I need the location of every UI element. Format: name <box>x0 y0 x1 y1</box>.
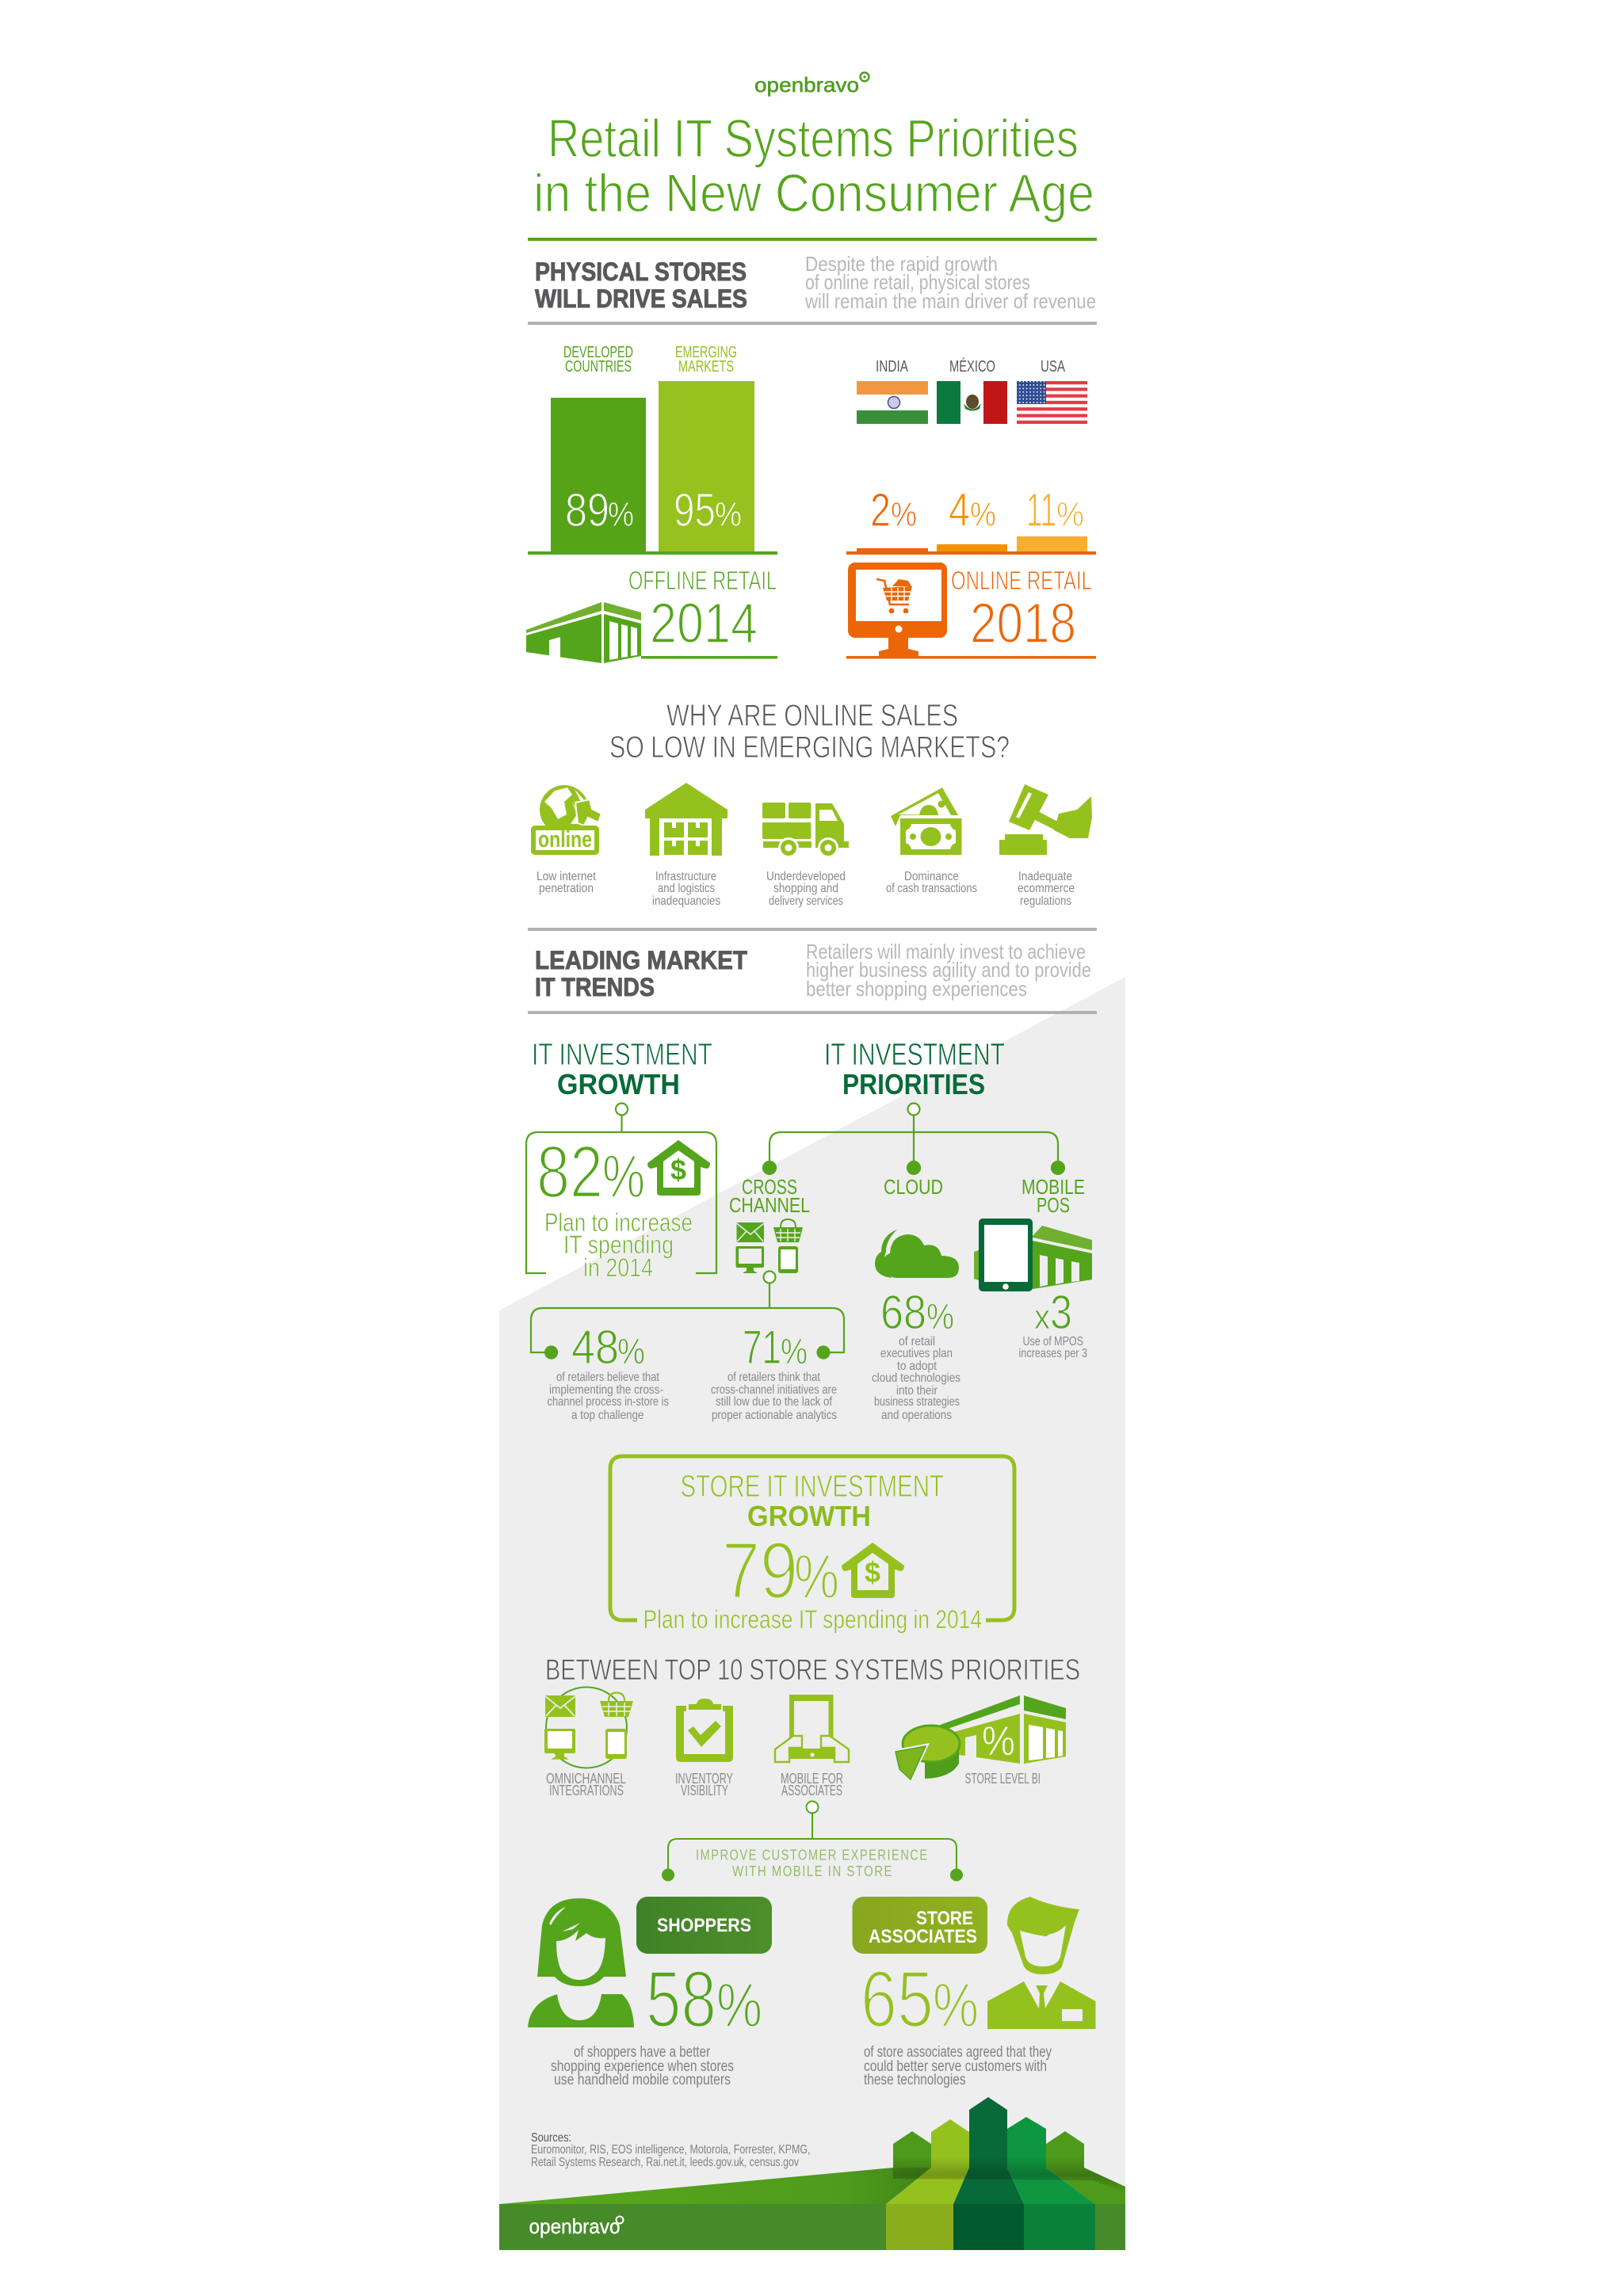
label: mobile pos: POS <box>1037 1193 1070 1217</box>
icon: tablet in store <box>974 1219 1092 1291</box>
text: 71% description: proper actionable analytics <box>712 1409 837 1422</box>
offline retail label: OFFLINE RETAIL <box>628 566 777 595</box>
logo: openbravo top: openbravo <box>754 73 859 97</box>
heading: IT investment growth: GROWTH <box>557 1068 680 1100</box>
footer: green arrows and road <box>499 2097 1125 2250</box>
subheading: physical stores: Despite the rapid growth <box>805 252 998 276</box>
gray background panel <box>499 977 1125 2250</box>
subheading: leading market: Retailers will mainly invest to achieve <box>806 940 1086 963</box>
heading: between top 10: BETWEEN TOP 10 STORE SYSTEMS PRIORITIES <box>545 1653 1080 1686</box>
arrow: light green <box>931 2119 969 2168</box>
label: cross channel <box>729 1175 810 1217</box>
text: 68% description: to adopt <box>897 1360 937 1373</box>
label: infrastructure: Infrastructure <box>655 870 716 883</box>
label: omnichannel: OMNICHANNEL <box>546 1771 626 1787</box>
stat: 82%: 82 <box>537 1131 603 1213</box>
label: mobile pos <box>1022 1175 1085 1217</box>
stat: 68%: % <box>926 1296 954 1337</box>
label: cash: of cash transactions <box>886 882 977 895</box>
badge: store associates: ASSOCIATES <box>869 1926 977 1947</box>
heading: physical stores <box>535 257 747 313</box>
year 2018: 2018 <box>970 593 1076 655</box>
text: 48% description <box>547 1371 669 1422</box>
heading: leading market it trends: LEADING MARKET <box>535 946 747 974</box>
label: low internet <box>537 870 596 895</box>
text: plan to increase: in 2014 <box>583 1253 653 1282</box>
text: 71% description <box>711 1371 837 1422</box>
panel: store associates <box>853 1897 1095 2088</box>
arrow: far left <box>893 2131 931 2168</box>
stat: 71%: 71 <box>743 1321 781 1374</box>
stat: 65%: 65 <box>861 1955 934 2044</box>
stat: 48%: % <box>617 1331 645 1371</box>
icon: inventory clipboard <box>676 1699 733 1762</box>
subheading: leading market: better shopping experiences <box>806 977 1027 1001</box>
icon: woman <box>528 1898 634 2027</box>
text: 71% description: of retailers think that <box>727 1371 820 1384</box>
flag: Mexico <box>937 381 1007 424</box>
icon: cash <box>891 788 962 855</box>
label: inventory: INVENTORY <box>675 1771 733 1787</box>
bar labels: MARKETS <box>678 358 734 376</box>
stat: 68%: 68 <box>880 1286 926 1339</box>
text: associates description: could better serve customers with <box>864 2058 1047 2075</box>
label: infrastructure: and logistics <box>658 882 715 895</box>
icon: monitor with cart <box>848 563 947 657</box>
heading: IT investment priorities: IT INVESTMENT <box>824 1038 1005 1072</box>
label: delivery services: shopping and <box>773 882 838 895</box>
label: delivery services: delivery services <box>769 894 843 908</box>
stat: x3: x <box>1034 1298 1050 1337</box>
label: store level BI: STORE LEVEL BI <box>965 1771 1041 1787</box>
heading: physical stores: PHYSICAL STORES <box>535 257 747 286</box>
icon: gavel and map <box>999 784 1092 855</box>
text: 71% description: still low due to the lack of <box>716 1395 832 1409</box>
stat: 79%: 79 <box>722 1527 798 1615</box>
label: inventory <box>675 1771 733 1798</box>
text: shoppers description: use handheld mobile computers <box>554 2072 731 2088</box>
text: shoppers description: shopping experience when stores <box>551 2058 734 2075</box>
heading: IT investment growth: IT INVESTMENT <box>532 1038 712 1072</box>
icon: low internet <box>531 785 601 855</box>
subheading: leading market: higher business agility and to provide <box>806 958 1091 982</box>
panel: store IT investment growth <box>610 1456 1014 1634</box>
text: sources: Sources: <box>531 2131 571 2145</box>
text: sources: Euromonitor, RIS, EOS intelligence, Motorola, Forrester, KPMG, <box>531 2143 810 2157</box>
text: shoppers description: of shoppers have a better <box>574 2044 711 2061</box>
label: omnichannel <box>546 1771 626 1798</box>
text: 68% description: cloud technologies <box>872 1371 960 1385</box>
heading: why are online sales so low: SO LOW IN EMERGING MARKETS? <box>609 730 1010 765</box>
text: associates description: these technologies <box>864 2072 966 2088</box>
text: shoppers description <box>551 2044 734 2088</box>
stat: x3: 3 <box>1050 1286 1072 1339</box>
heading: IT investment priorities <box>824 1038 1005 1100</box>
label: mobile for associates <box>781 1771 843 1798</box>
arrow: dark green <box>969 2097 1007 2168</box>
value: 11%: % <box>1056 496 1084 534</box>
icon: store <box>526 602 641 663</box>
value: 4%: 4 <box>949 484 970 536</box>
stat: 82%: % <box>602 1143 645 1211</box>
subheading: physical stores: of online retail, physical stores <box>805 270 1030 294</box>
text: associates description <box>864 2044 1052 2088</box>
text: 68% description: into their <box>896 1384 938 1398</box>
text: improve customer experience <box>696 1848 929 1879</box>
panel: online retail <box>846 357 1096 659</box>
heading: why are online sales so low <box>609 699 1010 765</box>
label: cloud: CLOUD <box>884 1175 943 1199</box>
value: 11%: 11 <box>1026 484 1056 536</box>
badge: shoppers <box>636 1897 772 1954</box>
subheading: physical stores: will remain the main driver of revenue <box>804 289 1096 313</box>
icon: delivery truck <box>762 803 849 858</box>
value: 2%: 2 <box>870 484 891 536</box>
icon: house with dollar: $ <box>865 1556 880 1589</box>
text: 68% description <box>872 1335 960 1422</box>
arrow: emerald <box>1007 2117 1046 2168</box>
text: 68% description: executives plan <box>880 1347 953 1360</box>
stat: 65%: % <box>933 1970 979 2040</box>
label: omnichannel: INTEGRATIONS <box>549 1783 624 1798</box>
title: Retail IT Systems Priorities <box>548 109 1079 169</box>
value: 2%: % <box>891 496 917 534</box>
label: cash: Dominance <box>904 870 959 883</box>
label: regulations <box>1018 870 1075 908</box>
country labels <box>876 357 1065 376</box>
label: infrastructure <box>652 870 720 908</box>
text: 48% description: channel process in-store is <box>547 1395 669 1409</box>
label: regulations: regulations <box>1020 894 1071 908</box>
heading: leading market it trends <box>535 946 747 1001</box>
bar: emerging 95% <box>659 381 754 551</box>
label: cross channel: CROSS <box>742 1175 797 1199</box>
badge: store associates <box>853 1897 987 1954</box>
bar: emerging 95%: % <box>715 496 742 534</box>
text: 68% description: business strategies <box>874 1395 960 1409</box>
stat: 79%: % <box>794 1541 839 1611</box>
value: 2% <box>857 484 928 551</box>
icon: house with dollar <box>842 1543 904 1598</box>
heading: leading market it trends: IT TRENDS <box>535 973 655 1001</box>
heading: why are online sales so low: WHY ARE ONLINE SALES <box>666 699 958 733</box>
heading: physical stores: WILL DRIVE SALES <box>535 284 747 313</box>
text: 68% description: of retail <box>899 1335 935 1348</box>
text: improve customer experience: IMPROVE CUSTOMER EXPERIENCE <box>696 1848 929 1863</box>
icon: cloud <box>875 1230 959 1278</box>
label: low internet: penetration <box>539 882 594 895</box>
icon: man <box>987 1897 1095 2029</box>
icon: omnichannel integrations <box>544 1688 633 1768</box>
value: 4%: % <box>970 496 996 534</box>
text: sources <box>531 2131 810 2169</box>
badge: shoppers: SHOPPERS <box>657 1915 751 1936</box>
icon: mobile for associates <box>775 1695 849 1762</box>
label: mobile for associates: MOBILE FOR <box>781 1771 843 1787</box>
text: x3 description: increases per 3 <box>1019 1347 1087 1360</box>
connector bracket <box>526 1103 716 1273</box>
text: 68% description: and operations <box>881 1409 952 1422</box>
icon: warehouse <box>645 783 727 856</box>
label: delivery services <box>766 870 846 908</box>
icon: low internet: online <box>538 827 592 852</box>
country labels: INDIA <box>876 358 909 376</box>
icon: cross channel devices <box>735 1219 803 1273</box>
panel: IT investment priorities <box>531 1038 1092 1422</box>
label: delivery services: Underdeveloped <box>766 870 846 883</box>
bar labels: COUNTRIES <box>565 358 632 376</box>
text: plan to increase: IT spending <box>563 1230 674 1259</box>
subheading: physical stores <box>804 252 1096 313</box>
stat: 58%: 58 <box>646 1955 716 2044</box>
text: improve customer experience: WITH MOBILE IN STORE <box>732 1863 893 1879</box>
text: 48% description: implementing the cross- <box>549 1383 663 1397</box>
value: 4% <box>937 484 1007 551</box>
panel: offline retail <box>526 344 777 663</box>
online retail label: ONLINE RETAIL <box>951 566 1092 595</box>
text: 71% description: cross-channel initiatives are <box>711 1383 837 1397</box>
flag: USA <box>1017 381 1087 424</box>
heading: growth: GROWTH <box>747 1500 871 1532</box>
panel: shoppers <box>528 1897 772 2088</box>
heading: store IT investment: STORE IT INVESTMENT <box>680 1470 944 1504</box>
label: cash <box>886 870 977 895</box>
text: sources: Retail Systems Research, Rai.net.it, leeds.gov.uk, census.gov <box>531 2156 799 2169</box>
stat: 48%: 48 <box>571 1321 619 1374</box>
bar labels <box>563 344 737 376</box>
heading: IT investment growth <box>532 1038 712 1100</box>
title: in the New Consumer Age <box>533 163 1094 223</box>
country labels: MÉXICO <box>949 357 995 376</box>
label: regulations: ecommerce <box>1018 882 1075 895</box>
flag: India <box>857 381 928 424</box>
text: associates description: of store associates agreed that they <box>864 2044 1052 2061</box>
icon: house with dollar <box>647 1140 710 1196</box>
text: plan to increase: Plan to increase IT spending in 2014 <box>643 1605 982 1634</box>
stat: 71%: % <box>781 1331 808 1371</box>
label: cross channel: CHANNEL <box>729 1193 810 1217</box>
label: inventory: VISIBILITY <box>681 1783 728 1798</box>
panel: IT investment growth <box>526 1038 716 1282</box>
logo: openbravo footer: openbravo <box>529 2214 620 2238</box>
arrow: far right <box>1046 2131 1084 2168</box>
label: mobile pos: MOBILE <box>1022 1175 1085 1199</box>
bar: developed 89%: % <box>608 496 634 534</box>
bar labels: EMERGING <box>675 344 737 361</box>
bar labels: DEVELOPED <box>563 344 633 361</box>
text: 48% description: a top challenge <box>571 1409 644 1422</box>
stat: x3 <box>1034 1286 1072 1339</box>
text: x3 description: Use of MPOS <box>1022 1335 1083 1348</box>
text: plan to increase: Plan to increase <box>544 1208 693 1237</box>
stat: 58%: % <box>716 1970 762 2040</box>
connector: improve customer experience <box>663 1802 962 1881</box>
year 2014: 2014 <box>650 593 758 655</box>
bar: emerging 95%: 95 <box>674 484 716 536</box>
title <box>533 109 1094 223</box>
bar: developed 89%: 89 <box>565 484 609 536</box>
icon: store level BI <box>896 1695 1066 1780</box>
value: 11% <box>1017 484 1087 551</box>
label: infrastructure: inadequancies <box>652 894 720 908</box>
label: low internet: Low internet <box>537 870 596 883</box>
text: 48% description: of retailers believe that <box>556 1371 659 1384</box>
badge: store associates: STORE <box>916 1908 973 1929</box>
bar: developed 89% <box>551 398 646 551</box>
text: x3 description <box>1019 1335 1087 1360</box>
text: plan to increase <box>544 1208 693 1282</box>
icon: house with dollar: $ <box>670 1154 686 1186</box>
connector: priorities tree <box>763 1103 1064 1174</box>
label: mobile for associates: ASSOCIATES <box>781 1783 842 1798</box>
connector: cross channel stats <box>531 1271 844 1358</box>
country labels: USA <box>1041 358 1065 376</box>
label: regulations: Inadequate <box>1018 870 1072 883</box>
heading: IT investment priorities: PRIORITIES <box>842 1068 985 1100</box>
subheading: leading market <box>806 940 1091 1001</box>
icon: store level BI: % <box>982 1718 1015 1764</box>
